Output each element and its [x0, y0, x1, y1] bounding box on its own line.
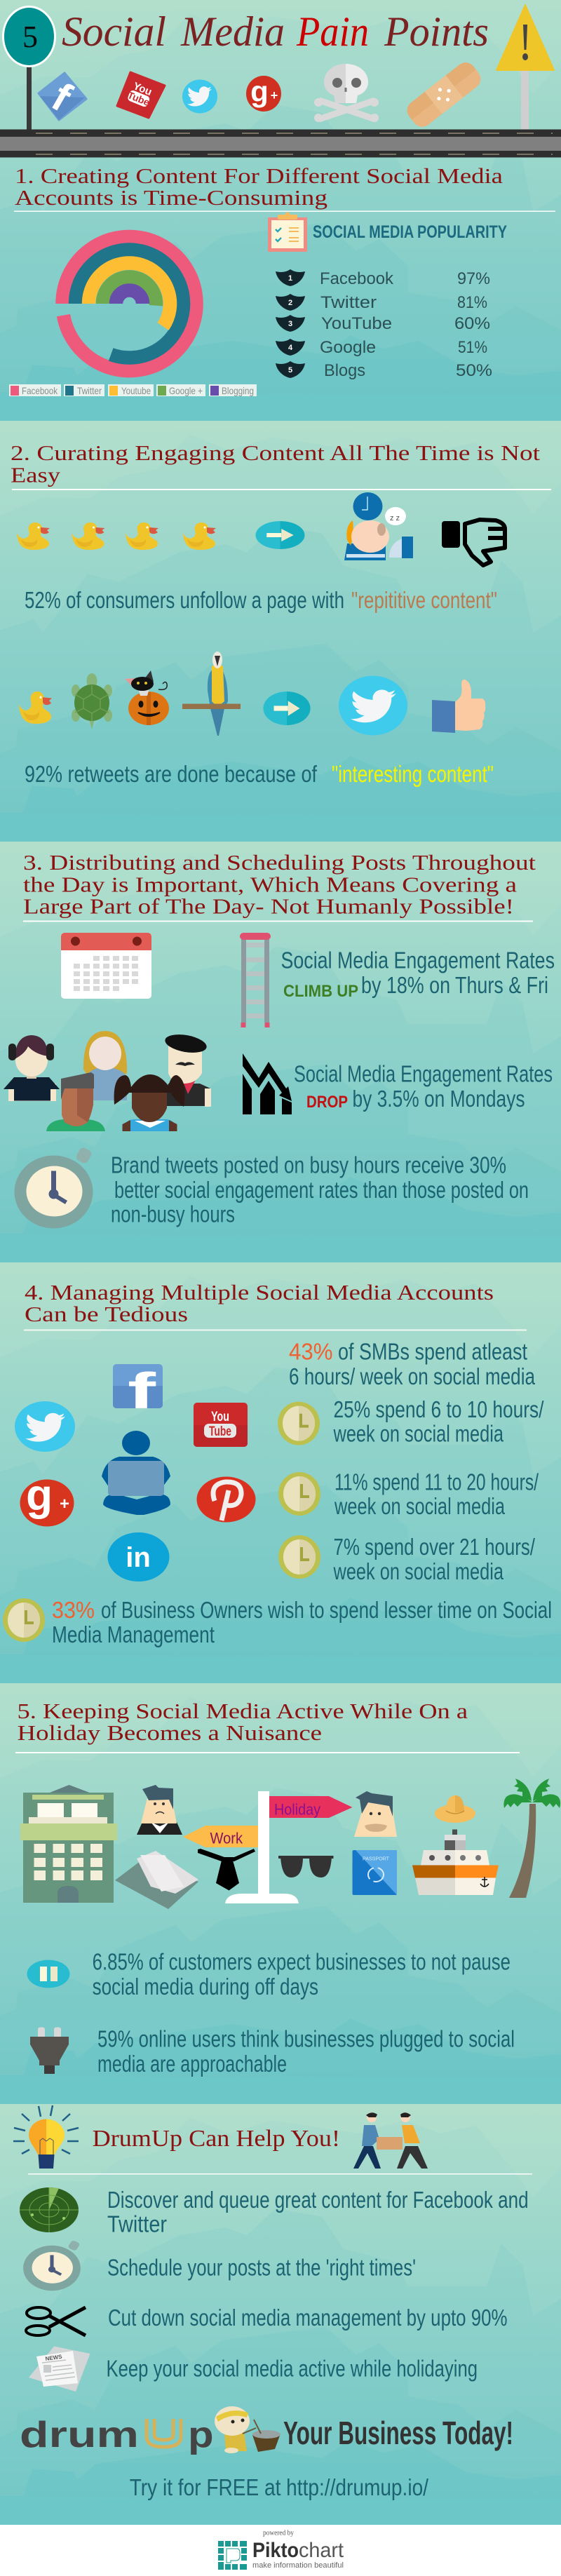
icon: sunglasses: [278, 1856, 334, 1877]
panel: drumup solution: [13, 2105, 532, 2500]
icon: light bulb: [13, 2105, 79, 2169]
icon: office building: [20, 1785, 117, 1903]
heading 3: Large Part of The Day- Not Humanly Possible!: [23, 893, 514, 919]
title: Pain: [296, 8, 369, 55]
icon: pause: [27, 1960, 70, 1988]
popularity list: YouTube: [321, 314, 392, 333]
text: customers expect: [93, 1949, 511, 2000]
icon: palm tree: [503, 1779, 560, 1898]
stat: 25 percent: week on social media: [333, 1421, 503, 1447]
heading 2: Easy: [11, 463, 61, 487]
heading 3: 3. Distributing and Scheduling Posts Throughout: [23, 850, 536, 875]
heading 3: [23, 850, 536, 919]
item: cut down: [26, 2305, 508, 2335]
person: blonde woman: [83, 1031, 127, 1100]
heading 5: 5. Keeping Social Media Active While On a: [17, 1699, 468, 1723]
icon: linkedin: [108, 1532, 170, 1582]
icon: happy man: [354, 1791, 397, 1837]
icon: youtube: [194, 1403, 248, 1447]
popularity list: 81%: [457, 293, 487, 312]
icon: linkedin: in: [126, 1542, 151, 1573]
radial bar chart: [62, 237, 196, 371]
icon: falling chart: [243, 1053, 292, 1114]
text: climb up: CLIMB UP: [283, 982, 358, 1001]
icon: clipboard: [268, 212, 307, 252]
icon: stopwatch: [23, 2240, 81, 2291]
icon: sun hat: [435, 1795, 475, 1823]
title: Media: [180, 8, 285, 55]
stat: 33 percent: Media Management: [52, 1621, 215, 1647]
icon: youtube: [117, 72, 165, 118]
icon: twitter: [339, 676, 407, 735]
sign: holiday: Holiday: [274, 1801, 320, 1818]
stat: 33 percent: [3, 1597, 552, 1647]
icon: cat in pumpkin: [125, 670, 169, 725]
popularity list: Google: [320, 338, 376, 357]
text: interesting content: 92% retweets are done because of: [25, 761, 318, 787]
heading 3: the Day is Important, Which Means Covering a: [23, 872, 517, 896]
stat: 11 percent: [278, 1469, 539, 1519]
icon: google plus: [246, 75, 281, 112]
icon: google plus: [20, 1471, 74, 1526]
icon: passport: [352, 1850, 397, 1895]
stat: 25 percent: [278, 1396, 544, 1447]
popularity list: [276, 269, 492, 380]
piktochart wordmark: make information beautiful: [252, 2561, 344, 2570]
icon: tie: [198, 1849, 255, 1891]
drumup logo: p: [188, 2415, 214, 2455]
person: headphones: [4, 1035, 60, 1101]
icon: youtube: You: [131, 80, 154, 98]
icon: google plus: +: [60, 1495, 69, 1513]
powered by: powered by: [263, 2530, 294, 2537]
item: schedule: [23, 2240, 416, 2291]
person: beret man: [163, 1032, 211, 1107]
heading 2: 2. Curating Engaging Content All The Time is Not: [11, 440, 540, 465]
icon: twitter: [182, 80, 217, 114]
icon: facebook: [113, 1363, 163, 1420]
popularity list: Blogs: [324, 361, 365, 380]
heading 4: 4. Managing Multiple Social Media Accounts: [25, 1280, 494, 1304]
icon: stopwatch: [14, 1146, 93, 1229]
text: repetitive content: "repititive content": [351, 587, 497, 613]
heading 5: Holiday Becomes a Nuisance: [17, 1720, 322, 1745]
text: SMB time spend: 43%: [289, 1338, 332, 1365]
text: online users: [97, 2026, 515, 2077]
icon: radar: [20, 2187, 79, 2232]
icon: plug: [30, 2028, 69, 2074]
icon: skull: [314, 64, 379, 122]
icon: thumbs up: [432, 680, 485, 733]
text: drop: DROP: [306, 1093, 348, 1112]
stat: 7 percent: [278, 1534, 536, 1584]
panel: pain point 1: [9, 163, 555, 396]
panel: header: [0, 5, 561, 157]
road sign pole: [27, 63, 32, 130]
chart legend: Youtube: [121, 385, 151, 396]
heading 4: Can be Tedious: [25, 1302, 188, 1326]
icon: youtube: You: [211, 1410, 229, 1424]
icon: ladder: [240, 933, 271, 1027]
icon: calendar: [61, 933, 151, 999]
text: drop: [294, 1060, 553, 1112]
text: online users: media are approachable: [97, 2051, 287, 2077]
icon: arrow: [263, 692, 311, 725]
item: keep active: [29, 2347, 478, 2392]
heading 1: [15, 163, 503, 210]
heading 5: [17, 1699, 468, 1745]
icon: youtube: Tube: [126, 89, 151, 108]
text: interesting content: "interesting content": [332, 761, 494, 787]
icon: pinterest: [196, 1477, 255, 1522]
heading: drumup can help: DrumUp Can Help You!: [93, 2126, 340, 2152]
icon: youtube: Tube: [209, 1424, 231, 1439]
popularity list: 97%: [457, 269, 490, 288]
panel: pain point 4: [3, 1280, 552, 1647]
chart legend: Twitter: [77, 385, 102, 396]
icon: thumbs down: [442, 520, 505, 565]
heading 1: Accounts is Time-Consuming: [15, 185, 327, 210]
number badge: 5: [22, 20, 38, 54]
icon: arrow: [255, 521, 304, 549]
panel: pain point 2: [11, 440, 551, 787]
icon: sleeping man: [344, 492, 413, 560]
icon: passport: PASSPORT: [363, 1857, 390, 1862]
icon: google plus: +: [271, 88, 278, 102]
popularity list: Facebook: [320, 269, 394, 288]
popularity list: 3: [288, 320, 292, 328]
icon: person with laptop: [102, 1431, 170, 1515]
icon: sleeping man: z z: [390, 514, 400, 522]
stat: 33 percent: 33%: [52, 1597, 95, 1623]
icon: two people with box: [353, 2112, 428, 2169]
icon: signpost: [183, 1791, 352, 1903]
popularity list: 2: [288, 299, 292, 307]
popularity list: 50%: [456, 361, 492, 380]
popularity list: 4: [288, 344, 293, 352]
heading 2: [11, 440, 540, 487]
icon: newspaper: [29, 2347, 90, 2392]
popularity list: 60%: [454, 314, 490, 333]
chart legend: Blogging: [222, 385, 254, 396]
sign: work: Work: [210, 1829, 243, 1847]
road: [0, 129, 561, 157]
text: brand tweets: [111, 1152, 529, 1227]
footer: piktochart: [0, 2525, 561, 2576]
illustration: people: [4, 1031, 211, 1131]
call to action: Try it for FREE at http://drumup.io/: [130, 2474, 429, 2500]
icon: drummer mascot: [215, 2406, 280, 2453]
icon: cruise ship: [412, 1829, 499, 1895]
stat: 7 percent: week on social media: [333, 1558, 503, 1584]
icon: twitter: [15, 1401, 75, 1452]
icon: google plus: g: [26, 1471, 53, 1520]
icon: facebook: f: [128, 1363, 157, 1420]
icon: facebook: f: [44, 74, 79, 121]
stat: 11 percent: week on social media: [334, 1493, 505, 1519]
icon: bandage: [403, 59, 485, 130]
piktochart wordmark: chart: [299, 2539, 344, 2562]
sign: holiday: [269, 1796, 352, 1818]
icon: newspaper: NEWS: [45, 2354, 63, 2362]
piktochart wordmark: [252, 2539, 344, 2570]
icon: scissors: [26, 2307, 86, 2335]
drumup logo: drum: [20, 2415, 139, 2455]
item: schedule: Schedule your posts at the 'right times': [107, 2255, 416, 2281]
drumup logo: [20, 2415, 214, 2455]
title: Points: [384, 8, 489, 55]
icon: angry man: [137, 1785, 182, 1835]
chart legend: Google +: [169, 385, 203, 396]
text: SMB time spend: [289, 1338, 536, 1389]
text: brand tweets: non-busy hours: [111, 1201, 235, 1227]
title: [62, 8, 489, 55]
chart legend: [9, 384, 257, 396]
icon: papers: [115, 1851, 198, 1909]
panel: pain point 3: [4, 850, 555, 1229]
text: climb up: [280, 948, 555, 1001]
chart legend: Facebook: [22, 385, 58, 396]
title: Social: [62, 8, 166, 55]
popularity list: 1: [288, 274, 292, 283]
number badge: [3, 7, 55, 66]
icon: google plus: g: [250, 75, 269, 108]
person: man with green shirt: [46, 1072, 105, 1131]
piktochart wordmark: Pikto: [252, 2539, 299, 2562]
popularity heading: SOCIAL MEDIA POPULARITY: [313, 222, 507, 242]
heading 4: [25, 1280, 494, 1326]
popularity list: 51%: [458, 338, 487, 357]
icon: duck: [19, 692, 52, 724]
text: customers expect: social media during off days: [93, 1974, 318, 2000]
icon: turtle: [72, 673, 112, 729]
item: discover: [20, 2187, 529, 2237]
heading 1: 1. Creating Content For Different Social Media: [15, 163, 503, 188]
warning sign: [496, 5, 554, 130]
panel: pain point 5: [15, 1699, 560, 2077]
popularity list: Twitter: [320, 293, 377, 312]
icon: four ducks: [17, 522, 216, 550]
icon: parrot: [182, 652, 241, 736]
piktochart logo mark: [218, 2541, 247, 2570]
sign: work: [183, 1826, 258, 1847]
popularity list: 5: [288, 366, 292, 375]
item: discover: Twitter: [107, 2211, 167, 2237]
person: girl with pigtails: [114, 1074, 185, 1131]
text: repetitive content: 52% of consumers unfollow a page with: [25, 587, 344, 613]
